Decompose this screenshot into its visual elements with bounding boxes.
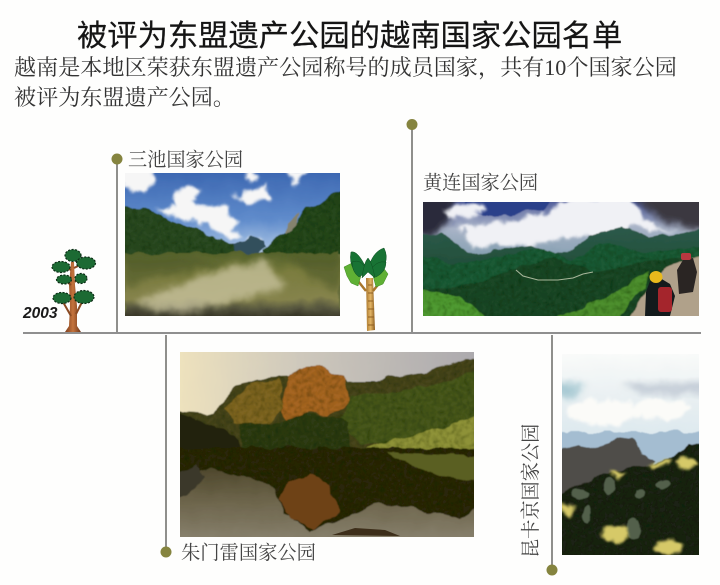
marker: 三池 stem and dot <box>112 154 122 332</box>
intro text: 被评为东盟遗产公园。 <box>14 85 235 110</box>
photo: Hoang Lien mountains <box>423 202 699 316</box>
label: 三池国家公园: 三池国家公园 <box>128 150 243 171</box>
intro text: 越南是本地区荣获东盟遗产公园称号的成员国家，共有10个国家公园 <box>14 55 677 80</box>
intro text <box>14 55 677 110</box>
label: 昆卡京国家公园 (vertical): 昆卡京国家公园 <box>521 424 542 558</box>
photo: Kinabalu summit and flowers <box>562 362 699 555</box>
icon: pine tree <box>52 250 96 332</box>
horizontal timeline axis <box>23 332 701 334</box>
icon: palm tree <box>344 248 388 331</box>
label: 黄连国家公园: 黄连国家公园 <box>423 173 538 194</box>
title: 被评为东盟遗产公园的越南国家公园名单 <box>77 20 622 53</box>
marker: 黄连 stem and dot <box>406 119 418 332</box>
photo: Ba Be lake <box>125 173 340 316</box>
photo: Chu Mom Ray forest and lake <box>180 352 474 537</box>
year label: 2003 <box>23 305 57 322</box>
marker: 朱门雷 stem and dot <box>160 335 172 558</box>
label: 朱门雷国家公园: 朱门雷国家公园 <box>181 543 316 564</box>
marker: 昆卡京 stem and dot <box>546 335 558 576</box>
